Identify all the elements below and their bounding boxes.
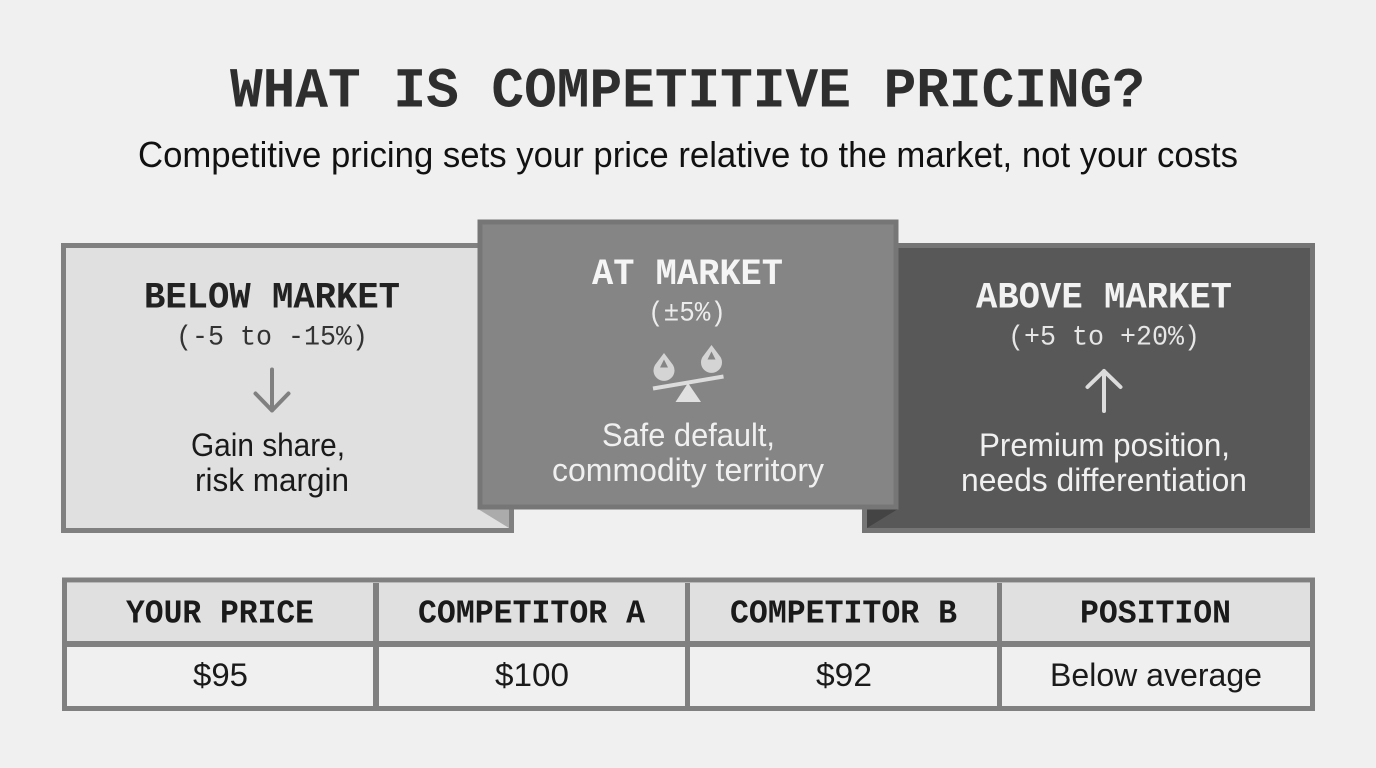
description: below market: risk margin: [195, 462, 349, 498]
table header row: COMPETITOR B: [730, 596, 957, 632]
table data row: [193, 657, 1262, 693]
description: at market: [552, 417, 825, 488]
fold: right ribbon: [867, 509, 898, 528]
description: below market: [191, 427, 349, 498]
range: above market: (+5 to +20%): [1008, 322, 1200, 354]
fold: left ribbon: [478, 509, 509, 528]
heading: below market: BELOW MARKET: [144, 278, 400, 320]
table data row: $100: [495, 657, 569, 693]
table header row: POSITION: [1080, 596, 1231, 632]
heading: at market: AT MARKET: [592, 254, 783, 296]
range: below market: (-5 to -15%): [176, 322, 368, 354]
description: above market: [961, 427, 1247, 498]
heading: above market: ABOVE MARKET: [976, 278, 1232, 320]
icon: balance scale: [653, 345, 724, 402]
table header row: YOUR PRICE: [126, 596, 314, 632]
panel: above market: [864, 246, 1312, 530]
range: at market: (±5%): [648, 298, 726, 330]
title: WHAT IS COMPETITIVE PRICING?: [230, 60, 1145, 124]
panel: at market: [480, 222, 896, 507]
subtitle: Competitive pricing sets your price relative to the market, not your costs: [138, 134, 1238, 175]
table data row: $95: [193, 657, 248, 693]
description: at market: Safe default,: [602, 417, 775, 453]
table data row: Below average: [1050, 657, 1262, 693]
table data row: $92: [816, 657, 872, 693]
icon: down arrow: [256, 370, 288, 410]
description: below market: Gain share,: [191, 427, 345, 463]
description: above market: Premium position,: [979, 427, 1230, 463]
table header row: [126, 596, 1231, 632]
description: at market: commodity territory: [552, 452, 825, 488]
panel: below market: [64, 246, 512, 530]
table header row: COMPETITOR A: [418, 596, 645, 632]
icon: up arrow: [1088, 371, 1120, 411]
comparison table: [64, 580, 1312, 708]
description: above market: needs differentiation: [961, 462, 1247, 498]
